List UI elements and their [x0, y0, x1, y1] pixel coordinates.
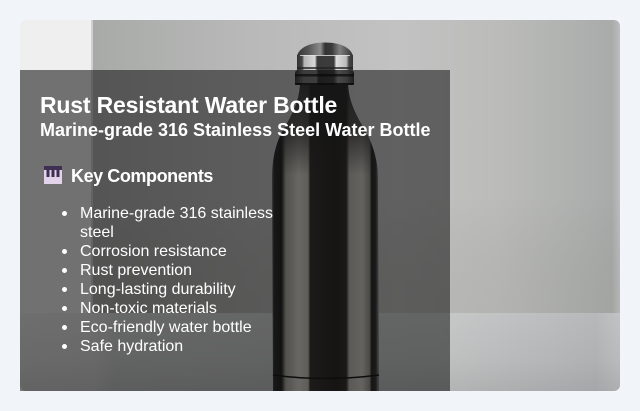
background wall — [92, 20, 620, 313]
list: key components: Rust prevention — [80, 262, 192, 279]
list: key components: steel — [80, 224, 114, 241]
text overlay panel — [20, 70, 450, 391]
icon: piano keys — [44, 166, 62, 184]
list: key components — [62, 205, 273, 355]
list: key components: Corrosion resistance — [80, 243, 227, 260]
list: key components: Non-toxic materials — [80, 300, 217, 317]
list: key components: Safe hydration — [80, 338, 183, 355]
bright left panel — [20, 20, 93, 313]
list: key components: Eco-friendly water bottle — [80, 319, 252, 336]
title: Rust Resistant Water Bottle — [40, 92, 337, 118]
list: key components: Marine-grade 316 stainless — [80, 205, 273, 222]
subtitle: Marine-grade 316 Stainless Steel Water Bottle — [40, 120, 430, 140]
table surface — [20, 313, 620, 391]
list: key components: Long-lasting durability — [80, 281, 236, 298]
bottle neck ridges — [295, 70, 354, 85]
bottle cap — [297, 42, 353, 70]
section heading: Key Components — [71, 166, 213, 186]
bottle body — [272, 84, 379, 391]
